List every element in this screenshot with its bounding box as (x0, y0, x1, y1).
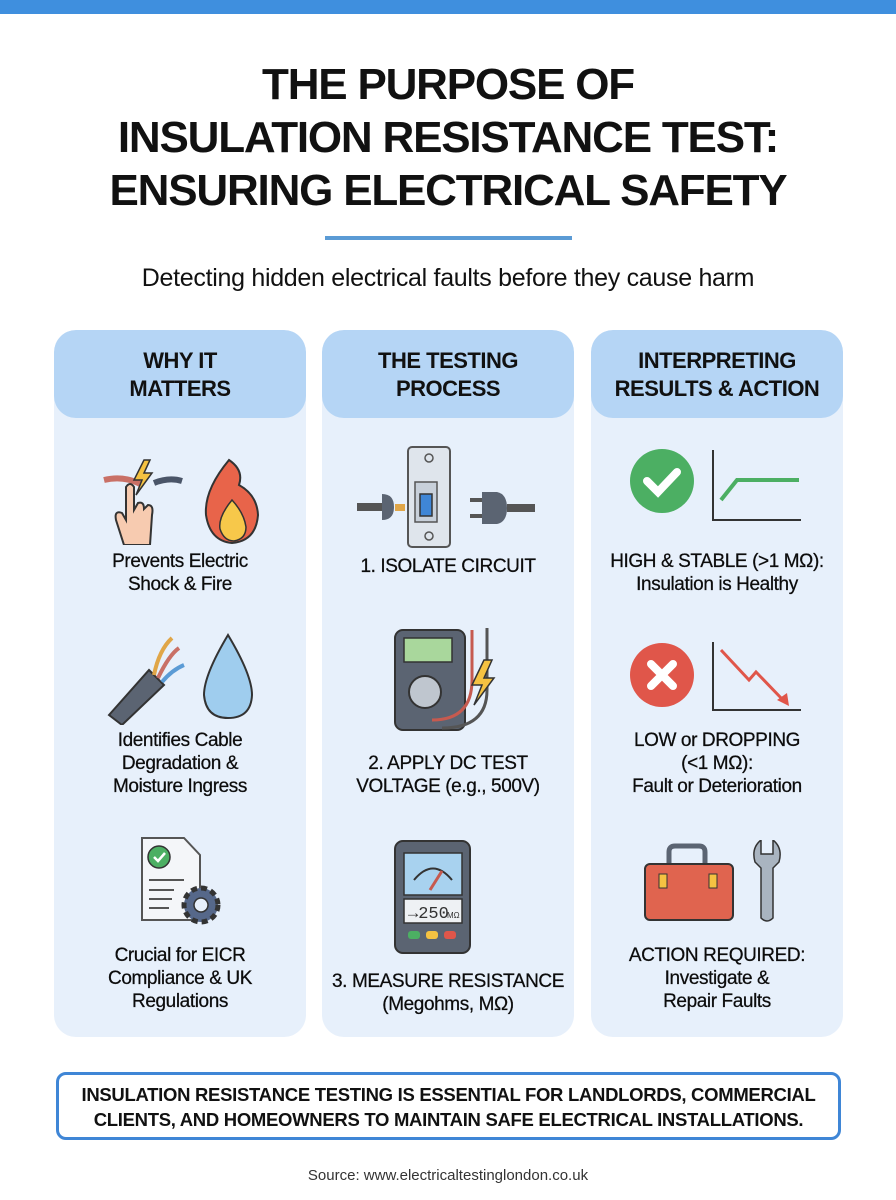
text: EICR compliance (108, 945, 252, 1012)
title (110, 60, 787, 215)
title: ENSURING ELECTRICAL SAFETY (110, 166, 786, 215)
icon: check and rising graph (630, 449, 801, 521)
icon: toolbox and wrench (644, 840, 781, 922)
source: Source: www.electricaltestinglondon.co.uk (308, 1167, 588, 1184)
heading (322, 330, 574, 418)
text: EICR compliance: Regulations (132, 991, 228, 1012)
icon: cross and falling graph (630, 642, 801, 711)
callout: bottom statement: INSULATION RESISTANCE TESTING IS ESSENTIAL FOR LANDLORDS, COMMERCIAL (81, 1084, 816, 1105)
text: action required: ACTION REQUIRED: (629, 945, 805, 966)
heading: RESULTS & ACTION (615, 376, 819, 401)
callout: bottom statement: CLIENTS, AND HOMEOWNERS TO MAINTAIN SAFE ELECTRICAL INSTALLATIONS. (94, 1109, 803, 1130)
icon: megohm meter: →250 (408, 905, 449, 924)
text: apply DC voltage: VOLTAGE (e.g., 500V) (356, 776, 540, 797)
text: cable degradation: Identifies Cable (118, 730, 242, 751)
heading: INTERPRETING (638, 348, 796, 373)
text: measure resistance: 3. MEASURE RESISTANCE (332, 971, 564, 992)
heading: PROCESS (396, 376, 500, 401)
panel: interpreting results (591, 330, 843, 1037)
text: action required (628, 945, 805, 1012)
heading: MATTERS (129, 376, 231, 401)
divider (325, 236, 572, 240)
title: THE PURPOSE OF (262, 60, 634, 109)
text: high and stable (610, 551, 824, 595)
text: measure resistance: (Megohms, MΩ) (382, 994, 514, 1015)
text: low or dropping: (<1 MΩ): (681, 753, 753, 774)
panel: why it matters (54, 330, 306, 1037)
text: high and stable: Insulation is Healthy (636, 574, 798, 595)
text: prevents shock: Prevents Electric (112, 551, 248, 572)
icon: hand shock and fire (103, 458, 259, 545)
text: action required: Repair Faults (663, 991, 771, 1012)
text: low or dropping (632, 730, 802, 797)
heading (591, 330, 843, 418)
text: isolate circuit: 1. ISOLATE CIRCUIT (360, 556, 536, 577)
text: action required: Investigate & (665, 968, 769, 989)
text: low or dropping: LOW or DROPPING (634, 730, 800, 751)
text: EICR compliance: Crucial for EICR (115, 945, 245, 966)
text: low or dropping: Fault or Deterioration (632, 776, 802, 797)
icon: megohm meter: MΩ (447, 911, 460, 920)
text: apply DC voltage: 2. APPLY DC TEST (368, 753, 528, 774)
title: INSULATION RESISTANCE TEST: (118, 113, 778, 162)
icon: document and gear (141, 837, 220, 924)
icon: multimeter (394, 628, 496, 731)
text: apply DC voltage (356, 753, 540, 797)
icon: megohm meter (394, 840, 471, 954)
callout: bottom statement (56, 1072, 841, 1140)
heading (54, 330, 306, 418)
panel: testing process (322, 330, 574, 1037)
heading: THE TESTING (378, 348, 518, 373)
text: cable degradation: Degradation & (122, 753, 238, 774)
text: high and stable: HIGH & STABLE (>1 MΩ): (610, 551, 824, 572)
text: EICR compliance: Compliance & UK (108, 968, 252, 989)
text: prevents shock (112, 551, 248, 595)
heading: WHY IT (143, 348, 217, 373)
subtitle: Detecting hidden electrical faults before they cause harm (142, 264, 754, 292)
icon: breaker and plugs (357, 446, 535, 548)
text: measure resistance (332, 971, 564, 1015)
text: cable degradation (113, 730, 247, 797)
text: prevents shock: Shock & Fire (128, 574, 232, 595)
text: cable degradation: Moisture Ingress (113, 776, 247, 797)
top bar (0, 0, 896, 14)
icon: cable and water drop (108, 633, 253, 725)
